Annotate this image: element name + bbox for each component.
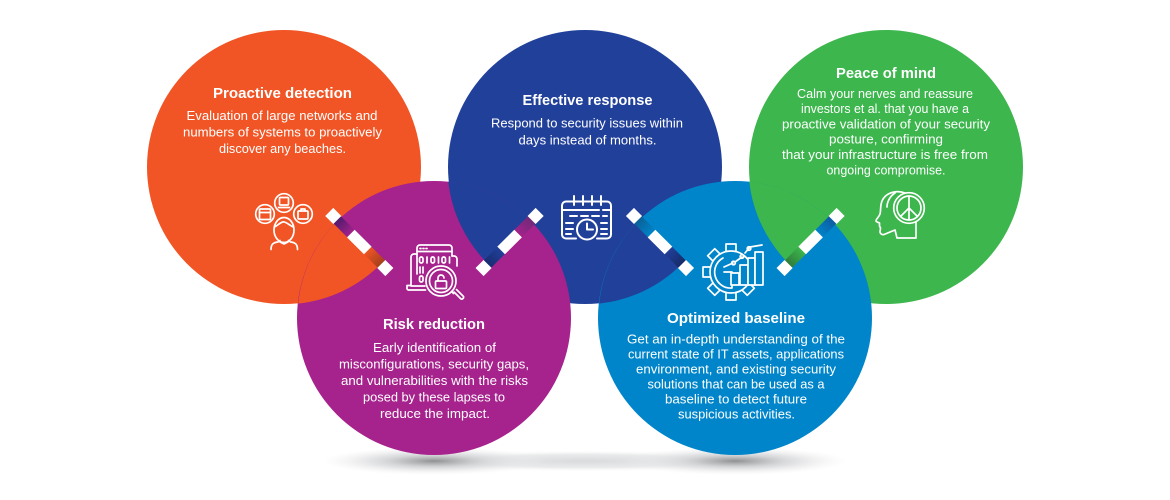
text: risk reduction description: misconfigurations, security gaps, xyxy=(339,358,529,372)
heading: peace of mind: Peace of mind xyxy=(836,65,936,82)
text: optimized baseline description: Get an in-depth understanding of the xyxy=(627,332,845,346)
text: optimized baseline description xyxy=(627,332,845,422)
link: blue to green xyxy=(777,208,845,276)
panel: optimized baseline circle xyxy=(598,181,872,455)
text: optimized baseline description: solutions that can be used as a xyxy=(648,378,824,392)
text: peace of mind description: that your infrastructure is free from xyxy=(782,148,988,162)
text: peace of mind description: proactive validation of your security xyxy=(782,118,991,132)
text: effective response description xyxy=(491,116,683,148)
text: peace of mind description: Calm your nerves and reassure xyxy=(797,87,973,101)
icon: head with peace symbol xyxy=(876,192,924,238)
link: orange to purple xyxy=(325,208,393,276)
text: proactive detection description xyxy=(183,109,383,156)
text: risk reduction description: and vulnerabilities with the risks xyxy=(341,374,528,388)
panel: effective response circle xyxy=(448,30,722,304)
panel: risk reduction circle xyxy=(297,181,571,455)
icon: calendar with clock xyxy=(562,196,611,240)
heading: effective response: Effective response xyxy=(522,92,652,109)
text: risk reduction description: posed by these lapses to xyxy=(363,390,505,404)
text: peace of mind description xyxy=(782,87,991,178)
text: effective response description: days instead of months. xyxy=(518,134,656,148)
text: optimized baseline description: baseline to detect future xyxy=(665,392,807,406)
icon: gear with rising bar chart xyxy=(703,244,763,300)
text: risk reduction description xyxy=(339,341,529,421)
panel: peace of mind circle xyxy=(749,30,1023,304)
heading: proactive detection: Proactive detection xyxy=(213,85,352,102)
text: risk reduction description: Early identification of xyxy=(373,341,497,355)
text: peace of mind description: posture, confirming xyxy=(829,132,943,146)
text: optimized baseline description: suspicious activities. xyxy=(678,408,795,422)
text: risk reduction description: reduce the impact. xyxy=(380,407,490,421)
link: purple to navy xyxy=(476,208,544,276)
text: peace of mind description: ongoing compromise. xyxy=(826,164,946,178)
text: optimized baseline description: environment, and existing security xyxy=(636,362,837,376)
text: proactive detection description: Evaluation of large networks and xyxy=(186,109,378,123)
text: proactive detection description: numbers of systems to proactively xyxy=(183,126,383,140)
text: optimized baseline description: current state of IT assets, applications xyxy=(628,348,844,362)
ground shadow xyxy=(322,447,847,475)
icon: data window with magnifier and lock xyxy=(407,245,464,299)
link: navy to blue xyxy=(626,208,694,276)
text: proactive detection description: discover any beaches. xyxy=(219,142,346,156)
panel: proactive detection circle xyxy=(147,30,421,304)
heading: optimized baseline: Optimized baseline xyxy=(667,310,805,327)
heading: risk reduction: Risk reduction xyxy=(383,316,485,333)
icon: person with devices xyxy=(256,194,312,250)
text: effective response description: Respond to security issues within xyxy=(491,116,683,130)
interlock overlaps xyxy=(298,182,832,304)
text: peace of mind description: investors et al. that you have a xyxy=(801,102,969,116)
